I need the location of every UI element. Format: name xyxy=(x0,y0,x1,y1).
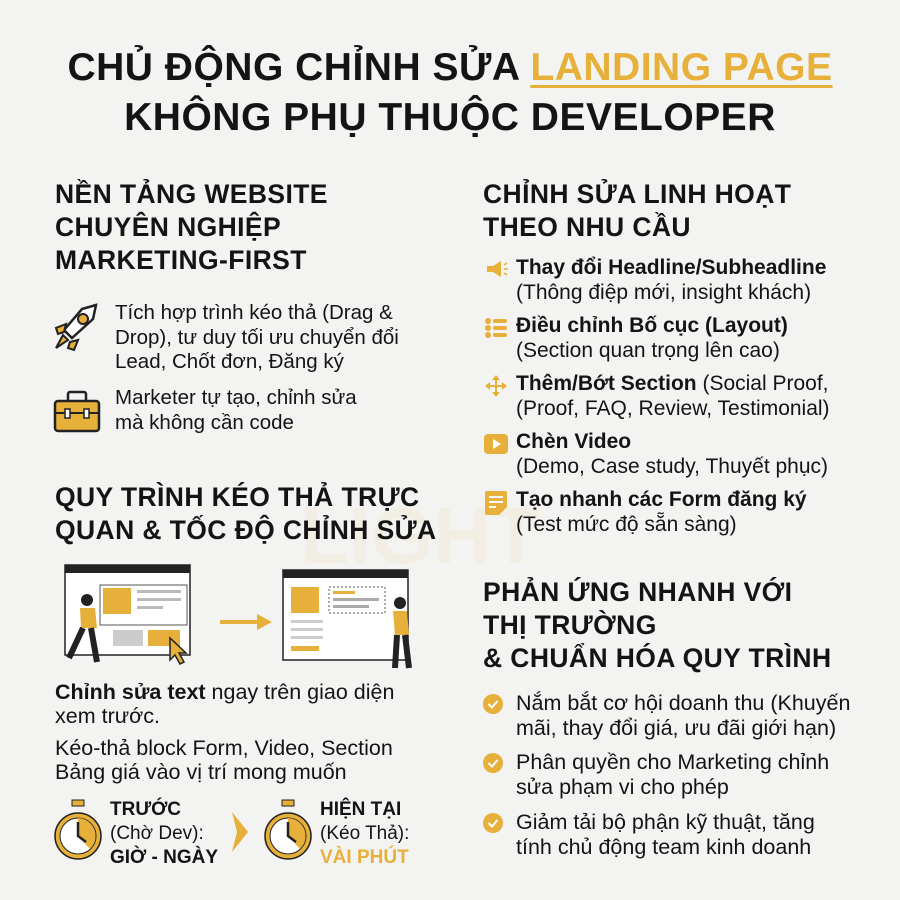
icon: megaphone xyxy=(487,261,508,277)
heading: chinh sua linh hoat xyxy=(483,179,791,242)
heading: chinh sua linh hoat: CHỈNH SỬA LINH HOẠT xyxy=(483,179,791,209)
text: form: (Test mức độ sẵn sàng) xyxy=(516,512,737,536)
list: benefits xyxy=(483,691,850,858)
text: bullet 2: mà không cần code xyxy=(115,410,294,434)
title: CHỦ ĐỘNG CHỈNH SỬA LANDING PAGE xyxy=(67,46,833,89)
text: video: (Demo, Case study, Thuyết phục) xyxy=(516,454,828,478)
text: chinh sua text: xem trước. xyxy=(55,704,160,728)
text: chinh sua text: Chỉnh sửa text ngay trên giao diện xyxy=(55,680,394,704)
text: layout: Điều chỉnh Bố cục (Layout) xyxy=(516,314,788,337)
heading: phan ung nhanh: & CHUẨN HÓA QUY TRÌNH xyxy=(483,643,832,673)
text: bullet 2 xyxy=(115,386,357,434)
text: bullet 1: Lead, Chốt đơn, Đăng ký xyxy=(115,350,344,373)
title: KHÔNG PHỤ THUỘC DEVELOPER xyxy=(124,96,776,139)
heading: phan ung nhanh: PHẢN ỨNG NHANH VỚI xyxy=(483,577,792,607)
icon: rocket xyxy=(54,303,98,352)
text: bullet 1: Tích hợp trình kéo thả (Drag & xyxy=(115,301,393,324)
text: form: Tạo nhanh các Form đăng ký xyxy=(516,488,807,511)
text: benefit 3: tính chủ động team kinh doanh xyxy=(516,834,811,858)
text: benefit 2: sửa phạm vi cho phép xyxy=(516,774,729,798)
text: bullet 1 xyxy=(115,301,399,373)
heading: nen tang: MARKETING-FIRST xyxy=(55,245,307,275)
text: layout: (Section quan trọng lên cao) xyxy=(516,338,780,362)
heading: nen tang: NỀN TẢNG WEBSITE xyxy=(55,179,328,209)
icon: check 3 xyxy=(483,813,503,833)
text: section: (Proof, FAQ, Review, Testimonial) xyxy=(516,396,830,420)
text: benefit 3 xyxy=(516,810,815,858)
text: truoc: GIỜ - NGÀY xyxy=(110,847,218,868)
title xyxy=(67,45,833,139)
text: chinh sua text xyxy=(55,680,394,728)
text: headline: Thay đổi Headline/Subheadline xyxy=(516,256,826,279)
text: form xyxy=(516,488,807,536)
heading: quy trinh xyxy=(55,482,437,545)
illustration: drag drop xyxy=(64,564,412,668)
watermark: LIGHT xyxy=(300,491,540,580)
text: benefit 1 xyxy=(516,691,850,740)
text: video xyxy=(516,430,828,478)
text: section xyxy=(516,372,830,420)
text: video: Chèn Video xyxy=(516,430,631,453)
heading: chinh sua linh hoat: THEO NHU CẦU xyxy=(483,212,691,242)
text: benefit 3: Giảm tải bộ phận kỹ thuật, tăng xyxy=(516,810,815,834)
icon: toolbox xyxy=(54,390,100,432)
text: keo tha block: Bảng giá vào vị trí mong muốn xyxy=(55,760,347,784)
text: hien tai: VÀI PHÚT xyxy=(320,847,409,868)
text: section: Thêm/Bớt Section (Social Proof, xyxy=(516,372,829,395)
text: benefit 1: mãi, thay đổi giá, ưu đãi giới hạn) xyxy=(516,716,836,740)
text: hien tai: HIỆN TẠI xyxy=(320,799,401,820)
text: truoc: TRƯỚC xyxy=(110,799,181,820)
heading: nen tang xyxy=(55,179,328,275)
heading: phan ung nhanh xyxy=(483,577,832,673)
icon: form xyxy=(485,491,507,515)
icon: check 1 xyxy=(483,694,503,714)
text: truoc xyxy=(110,798,218,868)
text: layout xyxy=(516,314,788,362)
icon: check 2 xyxy=(483,753,503,773)
icon: timer now xyxy=(264,800,312,860)
text: hien tai: (Kéo Thả): xyxy=(320,823,409,844)
heading: quy trinh: QUY TRÌNH KÉO THẢ TRỰC xyxy=(55,482,420,512)
icon: move arrows xyxy=(485,375,507,397)
heading: nen tang: CHUYÊN NGHIỆP xyxy=(55,212,281,242)
icon: list xyxy=(485,318,507,338)
text: benefit 2 xyxy=(516,750,829,798)
heading: phan ung nhanh: THỊ TRƯỜNG xyxy=(483,610,657,640)
list: features xyxy=(484,256,830,536)
icon: video xyxy=(484,434,508,454)
text: bullet 2: Marketer tự tạo, chỉnh sửa xyxy=(115,386,357,409)
heading: quy trinh: QUAN & TỐC ĐỘ CHỈNH SỬA xyxy=(55,515,437,545)
text: keo tha block: Kéo-thả block Form, Video, Section xyxy=(55,736,393,760)
text: headline xyxy=(516,256,826,304)
arrow: chevron xyxy=(232,812,248,852)
text: headline: (Thông điệp mới, insight khách) xyxy=(516,280,811,304)
text: truoc: (Chờ Dev): xyxy=(110,823,204,844)
text: bullet 1: Drop), tư duy tối ưu chuyển đổi xyxy=(115,326,399,348)
text: benefit 2: Phân quyền cho Marketing chỉnh xyxy=(516,750,829,774)
text: benefit 1: Nắm bắt cơ hội doanh thu (Khuyến xyxy=(516,691,850,715)
text: hien tai xyxy=(320,798,409,868)
icon: timer before xyxy=(54,800,102,860)
text: keo tha block xyxy=(55,736,393,784)
